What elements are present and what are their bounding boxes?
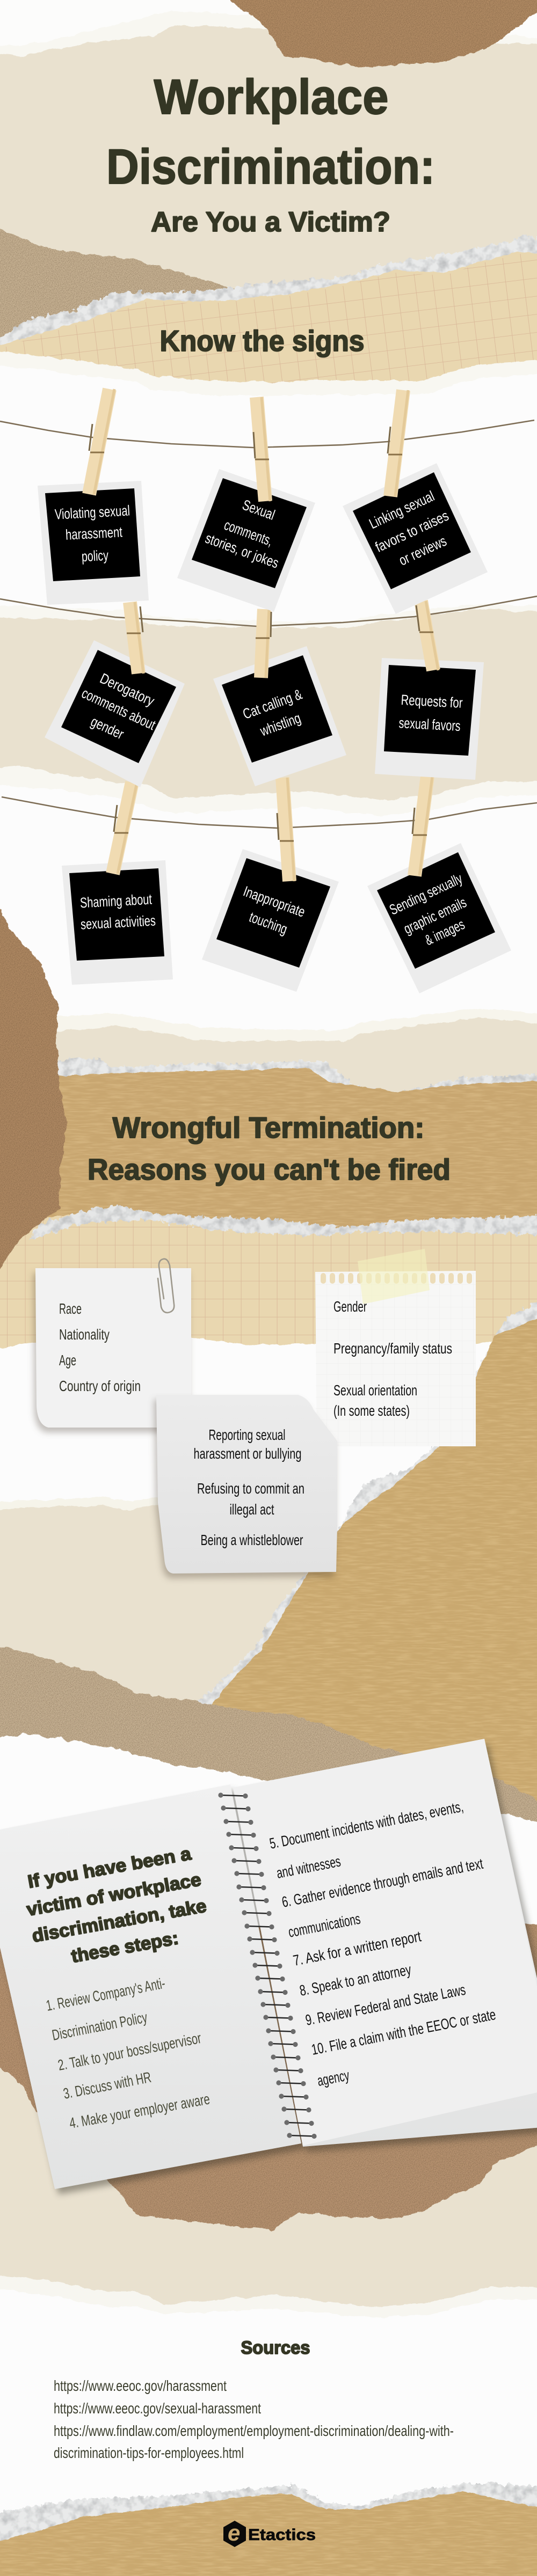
photo: shaming about sexual activities: Shaming about	[79, 891, 153, 911]
text: protected classes list one: Country of origin	[59, 1378, 141, 1394]
photo: violating sexual harassment policy	[38, 481, 149, 605]
text: source links: discrimination-tips-for-employees.html	[54, 2445, 244, 2461]
text: protected classes list two: Pregnancy/family status	[333, 1340, 452, 1357]
heading: if you have been a victim: If you have been a	[26, 1843, 193, 1892]
text: steps one to four: 1. Review Company's Anti-	[45, 1975, 166, 2014]
text: steps five to ten: agency	[316, 2067, 351, 2089]
icon: sticky tape	[358, 1249, 430, 1304]
panel: leather paper footer	[0, 2483, 537, 2576]
text: steps five to ten: communications	[287, 1911, 362, 1941]
photo: cat calling and whistling: whistling	[258, 710, 303, 740]
photo: shaming about sexual activities	[62, 860, 173, 985]
photo: inappropriate touching: Inappropriate	[241, 883, 307, 920]
photo: cat calling and whistling	[213, 646, 346, 786]
photo: violating sexual harassment policy: harassment	[65, 524, 123, 543]
heading: if you have been a victim: victim of workplace	[25, 1869, 202, 1920]
text: protected classes list two: (In some states)	[333, 1402, 410, 1419]
panel: white paper behind first clothesline	[0, 351, 537, 784]
text: protected classes list two	[333, 1298, 452, 1419]
brown torn paper on left edge	[0, 902, 67, 1277]
panel: leather paper behind wrongful termination heading	[0, 1058, 537, 1240]
panel: white paper behind notes	[0, 1338, 537, 1570]
icon: paperclip	[158, 1259, 174, 1313]
text: steps five to ten: 5. Document incidents with dates, events,	[268, 1798, 465, 1852]
photo: derogatory comments about gender	[45, 640, 185, 787]
title: Workplace	[154, 70, 389, 125]
icon: clothespin 2	[253, 397, 270, 501]
text: steps five to ten: 7. Ask for a written report	[292, 1928, 423, 1969]
text: protected classes list two: Sexual orientation	[333, 1382, 417, 1399]
heading: sources: Sources	[241, 2338, 310, 2358]
photo: requests for sexual favors	[375, 658, 484, 780]
icon: clothespin 7	[113, 782, 137, 874]
heading: wrongful termination: Reasons you can't be fired	[88, 1153, 451, 1186]
text: protected classes list two: Gender	[333, 1298, 367, 1315]
title	[106, 70, 435, 238]
text: protected activities list: harassment or bullying	[193, 1445, 302, 1462]
text: protected activities list: Refusing to commit an	[197, 1480, 304, 1497]
third row: string, photos and clothespins	[2, 777, 537, 993]
photo: derogatory comments about gender: comments about	[79, 685, 158, 733]
text: protected activities list	[193, 1426, 304, 1548]
photo: sexual comments, stories, or jokes	[177, 469, 315, 612]
panel: note with paperclip	[35, 1259, 191, 1428]
photo: sexual comments, stories, or jokes: comments,	[222, 517, 275, 549]
icon: clothespin 8	[277, 778, 294, 881]
text: protected classes list one: Race	[59, 1300, 82, 1317]
text: steps five to ten: 9. Review Federal and State Laws	[304, 1981, 467, 2029]
title: Discrimination:	[106, 140, 435, 194]
panel: kraft paper band	[0, 1642, 537, 1827]
second row: string, photos and clothespins	[0, 596, 537, 787]
icon: clothespin 1	[89, 389, 114, 494]
text: protected classes list one: Nationality	[59, 1326, 110, 1343]
photo: linking sexual favors to raises or reviews: favors to raises	[373, 508, 451, 555]
heading: if you have been a victim: these steps:	[70, 1928, 180, 1967]
text: protected activities list: Being a whistleblower	[201, 1532, 303, 1548]
text: steps one to four: 3. Discuss with HR	[62, 2069, 153, 2102]
photo: sending sexually graphic emails and images	[367, 843, 511, 993]
heading: wrongful termination	[88, 1111, 451, 1186]
text: steps five to ten: and witnesses	[275, 1853, 342, 1882]
text: source links: https://www.eeoc.gov/harassment	[54, 2377, 227, 2394]
photo: inappropriate touching: touching	[247, 909, 289, 938]
text: steps one to four: 4. Make your employer aware	[68, 2090, 211, 2132]
heading: if you have been a victim: discrimination, take	[31, 1896, 208, 1946]
photo: requests for sexual favors: sexual favors	[398, 715, 461, 734]
icon: clothespin 5	[256, 609, 271, 678]
icon: spiral binding	[218, 1792, 317, 2139]
photo: inappropriate touching	[202, 849, 339, 992]
photo: linking sexual favors to raises or reviews: or reviews	[396, 533, 449, 569]
text: protected classes list one	[59, 1300, 141, 1394]
photo: linking sexual favors to raises or reviews: Linking sexual	[367, 488, 437, 532]
icon: clothespin 9	[412, 777, 432, 876]
text: source links: https://www.eeoc.gov/sexual-harassment	[54, 2400, 261, 2417]
text: protected activities list: Reporting sexual	[208, 1426, 286, 1443]
photo: sexual comments, stories, or jokes: Sexual	[240, 496, 277, 523]
photo: requests for sexual favors: Requests for	[401, 692, 463, 711]
panel: leather diagonal paper	[193, 1299, 537, 1835]
photo: cat calling and whistling: Cat calling &	[241, 686, 304, 722]
panel: spiral notebook	[0, 1739, 537, 2189]
icon: clothespin 4	[127, 602, 143, 674]
photo: sending sexually graphic emails and images: & images	[422, 916, 467, 948]
text: source links	[54, 2377, 454, 2461]
photo: violating sexual harassment policy: policy	[81, 547, 109, 565]
photo: linking sexual favors to raises or reviews	[343, 463, 488, 614]
heading: know the signs: Know the signs	[160, 324, 364, 357]
photo: violating sexual harassment policy: Violating sexual	[54, 502, 130, 523]
first row: string, photos and clothespins	[0, 389, 534, 614]
panel: white paper behind sources	[0, 2274, 537, 2576]
icon: Etactics logo: Etactics	[248, 2526, 316, 2544]
text: steps five to ten	[268, 1798, 497, 2089]
icon: Etactics logo	[223, 2520, 316, 2547]
photo: shaming about sexual activities: sexual activities	[80, 912, 156, 933]
panel: brown paper under notebook	[0, 1924, 537, 2230]
text: protected activities list: illegal act	[230, 1501, 274, 1518]
photo: sending sexually graphic emails and images: Sending sexually	[387, 870, 465, 918]
photo: derogatory comments about gender: Derogatory	[98, 670, 157, 709]
icon: Etactics logo: e	[228, 2520, 240, 2545]
title: Are You a Victim?	[151, 207, 390, 238]
heading: wrongful termination: Wrongful Termination:	[113, 1111, 424, 1144]
text: steps one to four	[45, 1975, 211, 2132]
text: protected classes list one: Age	[59, 1352, 76, 1368]
panel: header torn papers	[0, 0, 537, 67]
heading: if you have been a victim	[25, 1843, 208, 1967]
panel: white paper behind third clothesline	[0, 766, 537, 1106]
panel: kraft and graph paper band	[0, 225, 537, 392]
icon: clothespin 3	[388, 390, 408, 496]
photo: derogatory comments about gender: gender	[89, 713, 126, 742]
panel: graph paper behind notes	[0, 1202, 537, 1363]
icon: clothespin 6	[416, 601, 438, 670]
text: steps one to four: Discrimination Policy	[50, 2009, 149, 2044]
photo: sexual comments, stories, or jokes: stories, or jokes	[203, 530, 281, 572]
panel: white paper below kraft	[0, 1725, 537, 1943]
text: steps five to ten: 8. Speak to an attorney	[298, 1961, 412, 1999]
panel: notebook-page note with tape	[315, 1249, 476, 1446]
panel: curled note	[156, 1395, 337, 1574]
photo: sending sexually graphic emails and images: graphic emails	[401, 894, 469, 937]
text: steps one to four: 2. Talk to your boss/supervisor	[56, 2030, 202, 2074]
